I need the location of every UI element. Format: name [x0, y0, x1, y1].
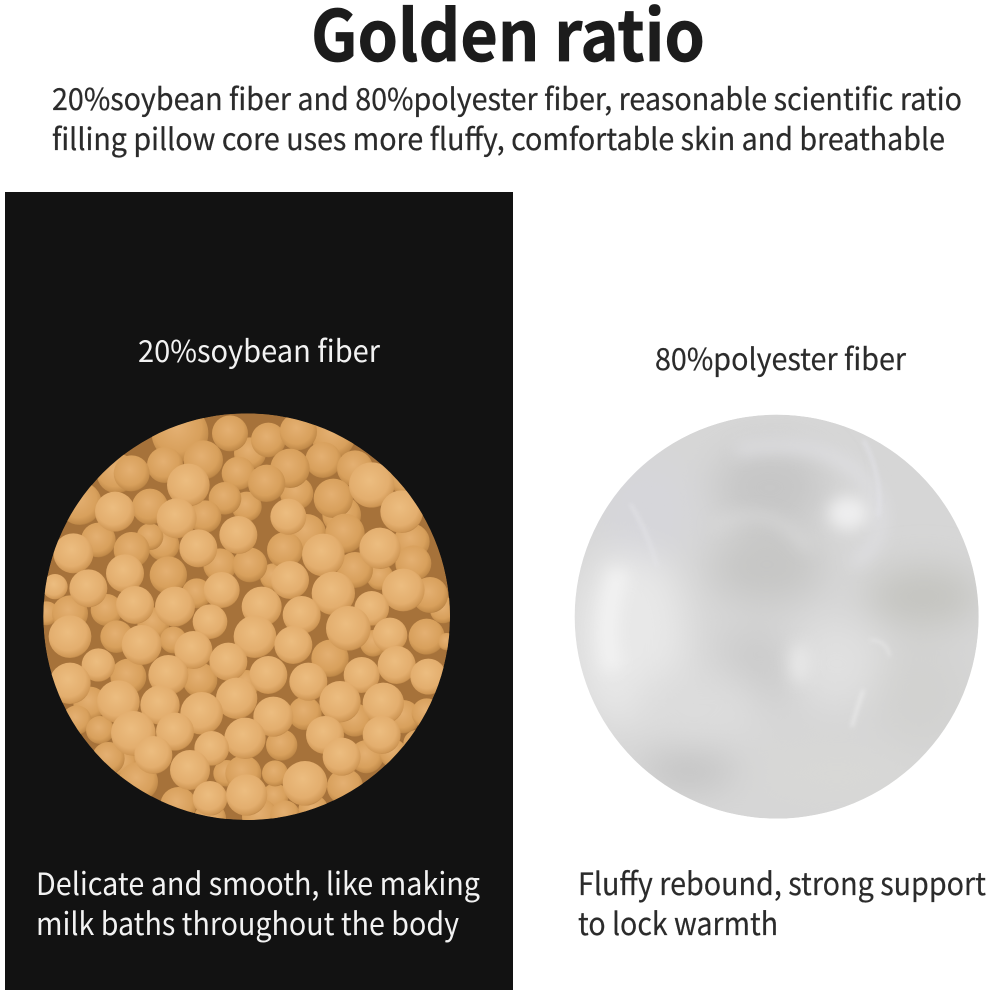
soybean label: 20%soybean fiber — [138, 327, 380, 371]
panel: soybean fiber — [5, 192, 513, 990]
polyester caption — [578, 859, 986, 944]
polyester caption: to lock warmth — [578, 899, 778, 944]
intro text: filling pillow core uses more fluffy, comfortable skin and breathable — [52, 115, 945, 159]
soybean caption: Delicate and smooth, like making — [36, 859, 480, 904]
panel: polyester fiber — [573, 335, 986, 944]
soybean caption: milk baths throughout the body — [36, 899, 459, 944]
polyester label: 80%polyester fiber — [655, 335, 906, 379]
soybean caption — [36, 859, 480, 944]
soybean photo circle — [35, 405, 457, 835]
intro text — [52, 75, 962, 159]
intro text: 20%soybean fiber and 80%polyester fiber, reasonable scientific ratio — [52, 75, 962, 119]
polyester photo circle — [573, 415, 980, 819]
